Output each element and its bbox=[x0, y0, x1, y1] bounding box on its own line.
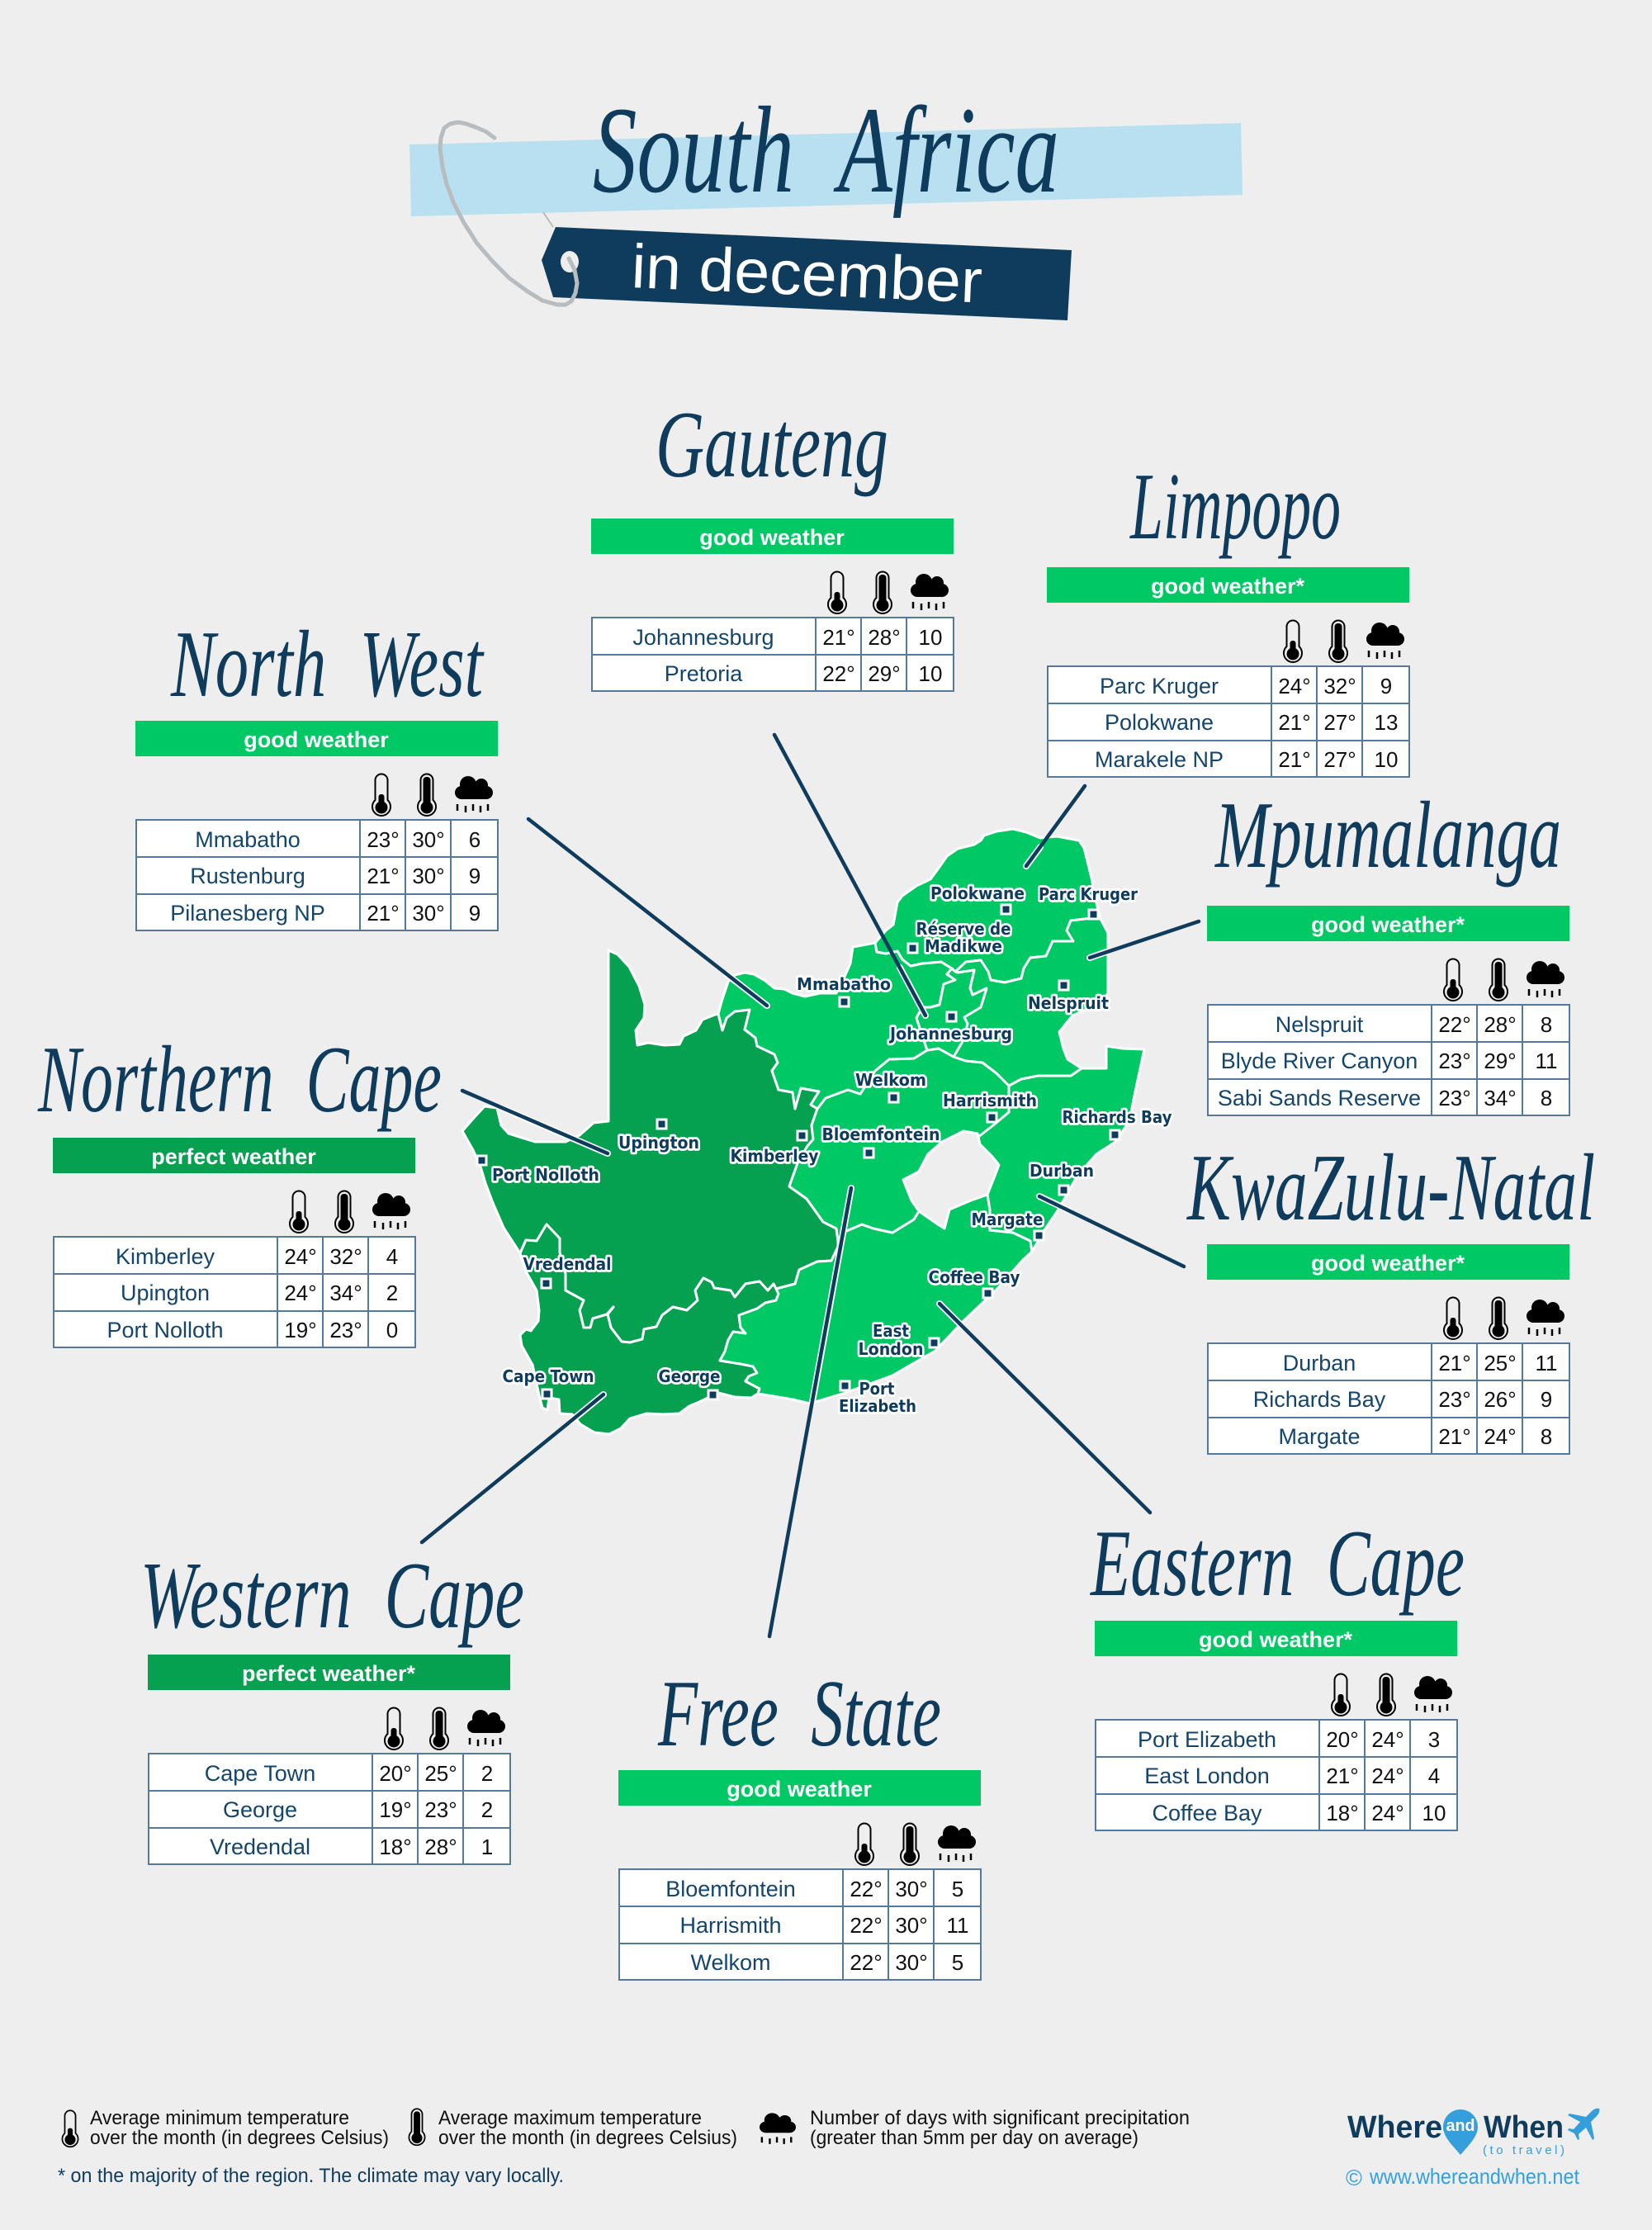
table: 8 bbox=[1541, 1086, 1552, 1110]
table: 4 bbox=[1428, 1764, 1440, 1788]
table: 27° bbox=[1323, 710, 1356, 735]
table: 26° bbox=[1484, 1387, 1517, 1412]
icons bbox=[1444, 1298, 1564, 1339]
icons bbox=[1444, 959, 1564, 1001]
heading: Free State bbox=[657, 1661, 941, 1766]
table: 22° bbox=[1438, 1012, 1471, 1037]
rating bar bbox=[1047, 567, 1409, 603]
footnote: * on the majority of the region. The climate may vary locally. bbox=[58, 2165, 564, 2187]
rating bar: good weather* bbox=[1311, 912, 1465, 937]
city labels: Johannesburg bbox=[888, 1024, 1012, 1044]
heading: North West bbox=[170, 612, 485, 717]
table: 28° bbox=[1484, 1012, 1517, 1037]
table: 32° bbox=[329, 1244, 362, 1269]
region: Mpumalanga bbox=[954, 918, 1108, 1086]
table: 24° bbox=[284, 1281, 317, 1305]
heading: Eastern Cape bbox=[1090, 1511, 1465, 1616]
table: Durban bbox=[1283, 1351, 1356, 1375]
table: Upington bbox=[121, 1281, 210, 1305]
leader: North West bbox=[528, 819, 767, 1006]
table: Vredendal bbox=[210, 1835, 310, 1859]
icons bbox=[290, 1191, 410, 1233]
panel: Mpumalanga bbox=[1207, 783, 1569, 1115]
table: Richards Bay bbox=[1253, 1387, 1386, 1412]
city labels: Elizabeth bbox=[839, 1396, 916, 1416]
icons bbox=[372, 774, 493, 816]
pin text: and: and bbox=[1446, 2117, 1474, 2135]
table: Parc Kruger bbox=[1100, 674, 1219, 698]
region: Northern Cape bbox=[462, 950, 838, 1342]
heading: Western Cape bbox=[140, 1543, 524, 1648]
region: Eastern Cape bbox=[720, 1195, 1032, 1404]
city labels: Réserve de bbox=[916, 919, 1011, 939]
heading: Limpopo bbox=[1129, 454, 1341, 559]
table: 30° bbox=[412, 827, 445, 852]
table: 22° bbox=[850, 1950, 883, 1975]
table: 10 bbox=[919, 625, 942, 650]
website: www.whereandwhen.net bbox=[1369, 2164, 1580, 2189]
table: Welkom bbox=[690, 1950, 771, 1975]
rating bar bbox=[591, 518, 954, 554]
table: 24° bbox=[1371, 1727, 1404, 1752]
rating bar: good weather bbox=[244, 727, 389, 752]
table: 30° bbox=[895, 1913, 928, 1938]
table bbox=[1096, 1720, 1457, 1830]
table bbox=[1208, 1343, 1569, 1454]
city labels: Coffee Bay bbox=[928, 1267, 1020, 1287]
table: Pilanesberg NP bbox=[170, 901, 325, 926]
region: Western Cape bbox=[520, 1224, 779, 1434]
panel: Free State bbox=[618, 1661, 981, 1980]
table: 23° bbox=[1438, 1049, 1471, 1073]
city markers bbox=[477, 905, 1119, 1399]
table: 10 bbox=[1422, 1801, 1446, 1825]
table: 8 bbox=[1541, 1012, 1552, 1037]
rating bar: good weather bbox=[727, 1777, 872, 1802]
table: 11 bbox=[1536, 1049, 1557, 1073]
map of South Africa bbox=[462, 829, 1144, 1434]
table: 2 bbox=[481, 1761, 493, 1786]
table: Nelspruit bbox=[1276, 1012, 1364, 1037]
table: 25° bbox=[1484, 1351, 1517, 1375]
city labels: Upington bbox=[618, 1133, 699, 1153]
table: 6 bbox=[469, 827, 480, 852]
rating bar bbox=[618, 1770, 981, 1806]
table bbox=[619, 1869, 981, 1980]
table: 9 bbox=[1380, 674, 1392, 698]
region: Limpopo bbox=[875, 829, 1101, 982]
table: 24° bbox=[1371, 1801, 1404, 1825]
icons bbox=[1284, 621, 1404, 662]
table: 21° bbox=[1278, 747, 1311, 772]
table: 5 bbox=[952, 1950, 963, 1975]
table: 21° bbox=[1438, 1351, 1471, 1375]
table: 29° bbox=[1484, 1049, 1517, 1073]
heading: Gauteng bbox=[656, 392, 888, 497]
rating bar bbox=[148, 1655, 510, 1690]
icon: precipitation bbox=[760, 2113, 796, 2144]
legend text: minimum temperature bbox=[90, 2107, 389, 2149]
table: Johannesburg bbox=[632, 625, 774, 650]
leader: Mpumalanga bbox=[1090, 921, 1199, 958]
title: South Africa: South Africa bbox=[593, 82, 1059, 219]
icons bbox=[855, 1823, 976, 1865]
table: 34° bbox=[329, 1281, 362, 1305]
wordmark: Where: Where bbox=[1347, 2110, 1442, 2145]
table: 23° bbox=[367, 827, 400, 852]
table: 20° bbox=[1326, 1727, 1359, 1752]
table bbox=[136, 820, 498, 930]
city labels: Welkom bbox=[855, 1070, 926, 1090]
tag hole bbox=[561, 251, 579, 272]
table: 20° bbox=[379, 1761, 412, 1786]
table: 19° bbox=[379, 1797, 412, 1822]
wordmark: When: When bbox=[1484, 2110, 1564, 2145]
panel: Gauteng bbox=[591, 392, 954, 691]
table: 23° bbox=[1438, 1086, 1471, 1110]
leader: KwaZulu-Natal bbox=[1039, 1196, 1184, 1267]
table: George bbox=[223, 1797, 297, 1822]
city labels: George bbox=[659, 1366, 720, 1386]
icons bbox=[828, 571, 949, 613]
heading: Northern Cape bbox=[37, 1027, 442, 1132]
table: 27° bbox=[1323, 747, 1356, 772]
table bbox=[1048, 666, 1409, 777]
table: 30° bbox=[895, 1877, 928, 1901]
rating bar: good weather* bbox=[1199, 1627, 1352, 1652]
city labels: Margate bbox=[971, 1210, 1044, 1229]
table bbox=[54, 1237, 415, 1347]
city labels: Nelspruit bbox=[1028, 993, 1109, 1013]
table: Marakele NP bbox=[1095, 747, 1224, 772]
table: 22° bbox=[822, 661, 855, 686]
icon: maximum temperature bbox=[409, 2109, 425, 2145]
icons bbox=[1332, 1674, 1452, 1716]
city labels: East bbox=[873, 1321, 909, 1341]
table: 19° bbox=[284, 1318, 317, 1342]
table: 23° bbox=[424, 1797, 457, 1822]
legend text: minimum temperature: Average minimum temperature bbox=[90, 2107, 349, 2129]
table: 3 bbox=[1428, 1727, 1440, 1752]
table: 22° bbox=[850, 1877, 883, 1901]
leader: Northern Cape bbox=[462, 1091, 608, 1153]
table: 18° bbox=[379, 1835, 412, 1859]
rating bar bbox=[1207, 906, 1569, 941]
table: Rustenburg bbox=[190, 864, 305, 888]
rating bar bbox=[1095, 1621, 1457, 1656]
table: Coffee Bay bbox=[1152, 1801, 1262, 1825]
table: 11 bbox=[946, 1913, 969, 1938]
panel: Eastern Cape bbox=[1090, 1511, 1465, 1830]
panel: KwaZulu-Natal bbox=[1186, 1135, 1595, 1454]
panel: North West bbox=[135, 612, 498, 930]
table: Harrismith bbox=[679, 1913, 782, 1938]
city labels: Polokwane bbox=[930, 883, 1025, 903]
city labels: Durban bbox=[1030, 1161, 1094, 1181]
table: 5 bbox=[952, 1877, 963, 1901]
table: 0 bbox=[386, 1318, 398, 1342]
tag string back segment bbox=[543, 212, 553, 227]
table: 11 bbox=[1536, 1351, 1557, 1375]
city labels: Richards Bay bbox=[1062, 1107, 1172, 1127]
rating bar bbox=[135, 721, 498, 756]
table: Bloemfontein bbox=[665, 1877, 796, 1901]
legend text: maximum temperature: over the month (in degrees Celsius) bbox=[438, 2127, 737, 2149]
table: 21° bbox=[367, 901, 400, 926]
table: 21° bbox=[1438, 1424, 1471, 1449]
legend text: precipitation: (greater than 5mm per day on average) bbox=[810, 2127, 1138, 2149]
leader: Free State bbox=[769, 1188, 851, 1636]
table: 8 bbox=[1541, 1424, 1552, 1449]
leader: Western Cape bbox=[422, 1394, 604, 1542]
table: Port Elizabeth bbox=[1138, 1727, 1276, 1752]
legend text: minimum temperature: over the month (in degrees Celsius) bbox=[90, 2127, 389, 2149]
table: 13 bbox=[1375, 710, 1398, 735]
table: Kimberley bbox=[116, 1244, 215, 1269]
table: 21° bbox=[822, 625, 855, 650]
rating bar: good weather bbox=[699, 525, 845, 550]
table: 21° bbox=[1326, 1764, 1359, 1788]
copyright mark: © bbox=[1346, 2166, 1362, 2190]
city labels: Cape Town bbox=[502, 1366, 594, 1386]
table: 28° bbox=[868, 625, 901, 650]
legend bbox=[58, 2107, 1190, 2187]
icon: minimum temperature bbox=[62, 2110, 78, 2147]
table: 30° bbox=[412, 901, 445, 926]
panel: Northern Cape bbox=[37, 1027, 442, 1347]
table: 28° bbox=[424, 1835, 457, 1859]
rating bar bbox=[53, 1138, 415, 1173]
leader: Limpopo bbox=[1026, 786, 1085, 866]
panel: Western Cape bbox=[140, 1543, 524, 1864]
table: 30° bbox=[895, 1950, 928, 1975]
table: 30° bbox=[412, 864, 445, 888]
table bbox=[592, 618, 954, 691]
leader: Gauteng bbox=[774, 735, 925, 1016]
icon: map pin bbox=[1443, 2109, 1478, 2155]
legend text: maximum temperature bbox=[438, 2107, 737, 2149]
title block bbox=[409, 82, 1243, 320]
city labels: Bloemfontein bbox=[822, 1124, 940, 1144]
table: East London bbox=[1144, 1764, 1270, 1788]
subtitle: in december: in december bbox=[630, 231, 984, 316]
table: 2 bbox=[386, 1281, 398, 1305]
rating bar bbox=[1207, 1244, 1569, 1280]
region: Free State bbox=[789, 1049, 1009, 1247]
city labels: Kimberley bbox=[730, 1146, 819, 1166]
table: 24° bbox=[1371, 1764, 1404, 1788]
city labels: Parc Kruger bbox=[1039, 884, 1138, 904]
city labels bbox=[492, 883, 1172, 1416]
table: 23° bbox=[1438, 1387, 1471, 1412]
city labels: Madikwe bbox=[925, 936, 1002, 956]
tag string bbox=[440, 122, 577, 305]
city labels: London bbox=[859, 1339, 923, 1359]
luggage tag bbox=[542, 227, 1072, 320]
title banner bbox=[409, 123, 1243, 216]
rating bar: perfect weather* bbox=[242, 1661, 416, 1686]
logo: Where and When bbox=[1346, 2109, 1599, 2190]
table: 24° bbox=[1278, 674, 1311, 698]
table: Cape Town bbox=[205, 1761, 315, 1786]
table: 4 bbox=[386, 1244, 398, 1269]
table: Port Nolloth bbox=[107, 1318, 224, 1342]
table: 9 bbox=[1541, 1387, 1552, 1412]
city labels: Vredendal bbox=[523, 1254, 611, 1274]
table: 18° bbox=[1326, 1801, 1359, 1825]
table: 21° bbox=[367, 864, 400, 888]
rating bar: good weather* bbox=[1311, 1251, 1465, 1276]
table bbox=[149, 1754, 510, 1864]
table: 9 bbox=[469, 864, 480, 888]
table: 22° bbox=[850, 1913, 883, 1938]
tagline: (to travel) bbox=[1483, 2143, 1564, 2157]
table: Mmabatho bbox=[195, 827, 301, 852]
table: Blyde River Canyon bbox=[1221, 1049, 1418, 1073]
panel: Limpopo bbox=[1047, 454, 1409, 777]
table: 23° bbox=[329, 1318, 362, 1342]
table bbox=[1208, 1005, 1569, 1115]
table: 24° bbox=[1484, 1424, 1517, 1449]
table: Polokwane bbox=[1105, 710, 1214, 735]
table: Margate bbox=[1278, 1424, 1361, 1449]
table: 29° bbox=[868, 661, 901, 686]
city labels: Mmabatho bbox=[797, 974, 891, 994]
rating bar: good weather* bbox=[1151, 574, 1304, 599]
region: KwaZulu-Natal bbox=[977, 1046, 1144, 1252]
region: Gauteng bbox=[916, 968, 987, 1057]
legend text: maximum temperature: Average maximum temperature bbox=[438, 2107, 702, 2129]
legend text: precipitation bbox=[810, 2107, 1190, 2149]
table: Sabi Sands Reserve bbox=[1218, 1086, 1421, 1110]
table: 21° bbox=[1278, 710, 1311, 735]
table: 25° bbox=[424, 1761, 457, 1786]
table: 2 bbox=[481, 1797, 493, 1822]
city labels: Port bbox=[859, 1379, 895, 1399]
leader lines bbox=[422, 735, 1199, 1636]
region: North West bbox=[718, 943, 955, 1109]
icon: plane bbox=[1568, 2109, 1599, 2140]
table: 32° bbox=[1323, 674, 1356, 698]
table: Pretoria bbox=[665, 661, 743, 686]
table: 24° bbox=[284, 1244, 317, 1269]
rating bar: perfect weather bbox=[151, 1144, 316, 1169]
table: 10 bbox=[1375, 747, 1398, 772]
table: 1 bbox=[481, 1835, 493, 1859]
city labels: Port Nolloth bbox=[492, 1165, 599, 1185]
icons bbox=[385, 1707, 505, 1749]
table: 9 bbox=[469, 901, 480, 926]
table: 34° bbox=[1484, 1086, 1517, 1110]
city labels: Harrismith bbox=[943, 1091, 1037, 1110]
legend text: precipitation: Number of days with significant precipitation bbox=[810, 2107, 1190, 2129]
table: 10 bbox=[919, 661, 942, 686]
leader: Eastern Cape bbox=[940, 1304, 1150, 1513]
